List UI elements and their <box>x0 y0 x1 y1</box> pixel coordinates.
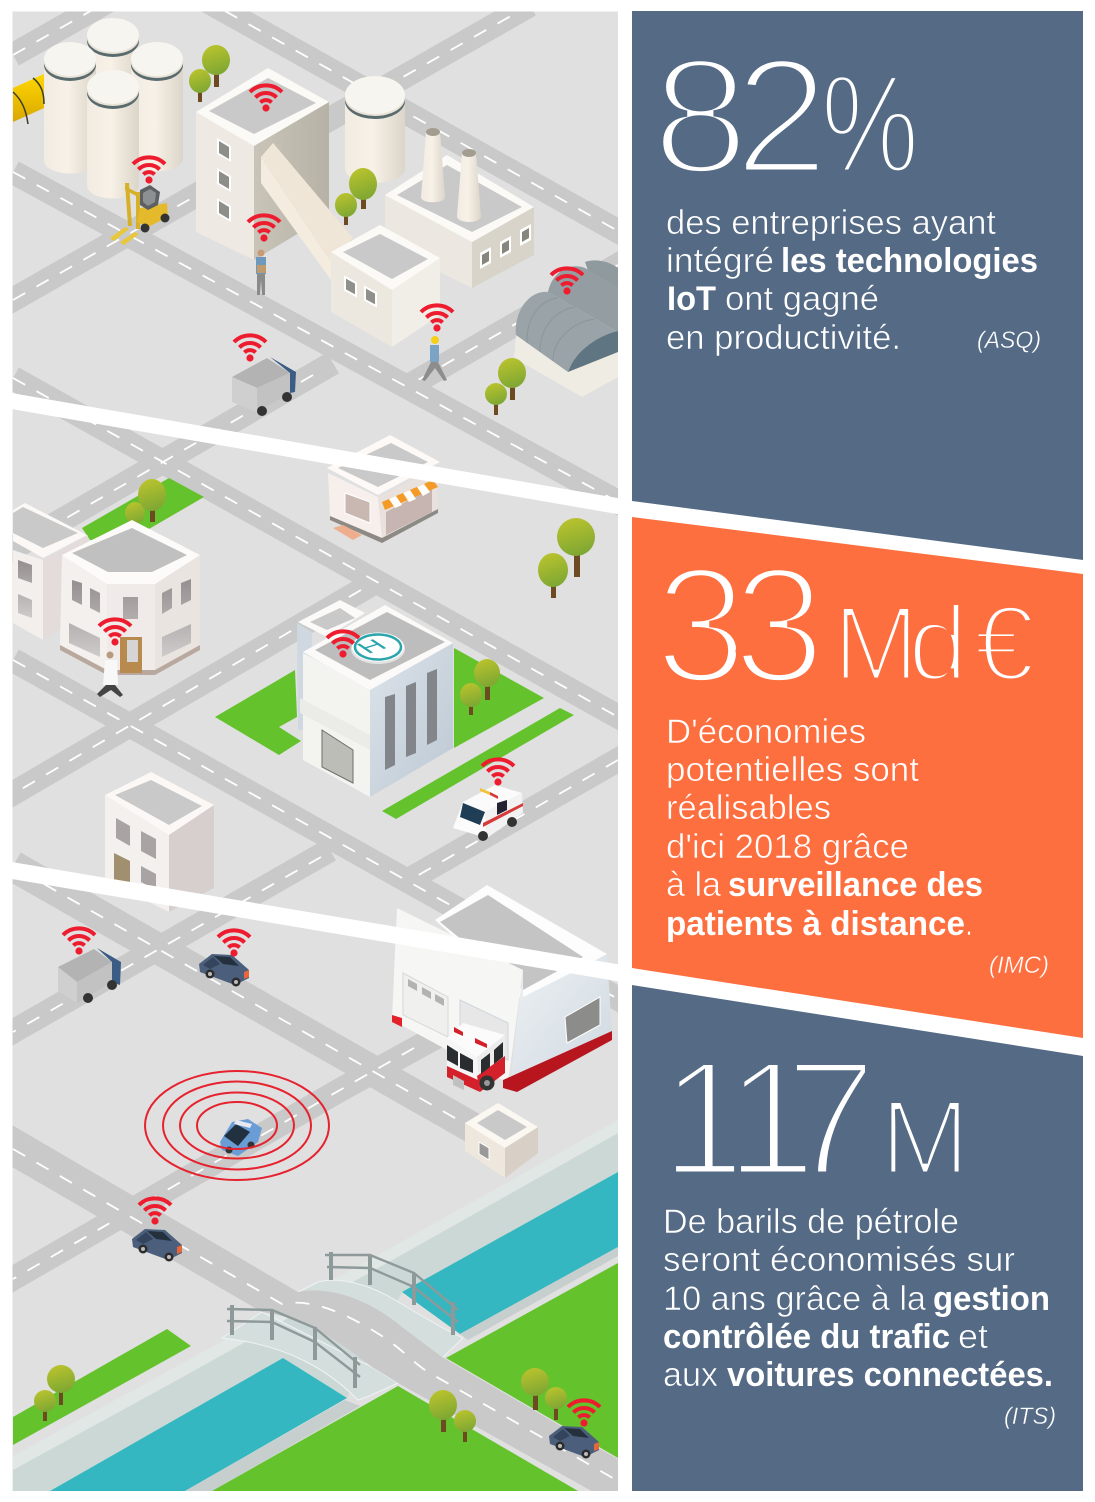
left arch <box>222 1312 398 1400</box>
worker with parcel <box>256 250 266 295</box>
big number 33 Md€: M <box>833 583 919 703</box>
body text <box>666 204 1038 357</box>
source ITS: (ITS) <box>1004 1403 1056 1430</box>
right arch <box>298 1280 463 1358</box>
conveyor <box>261 143 353 280</box>
body text: IoT <box>667 280 716 318</box>
body text: . <box>965 905 973 943</box>
worker with helmet <box>422 336 447 381</box>
factory small block <box>331 225 440 347</box>
bridge road deck <box>0 1118 640 1502</box>
body text: aux <box>663 1356 718 1394</box>
fire station <box>392 885 612 1092</box>
canal with water and banks <box>13 1120 618 1491</box>
helipad <box>351 632 405 664</box>
body text: d'ici 2018 grâce <box>666 828 909 866</box>
blue car on road <box>132 1229 182 1262</box>
body text <box>666 713 983 943</box>
big number 82%: 2 <box>734 24 829 208</box>
helipad: H <box>351 636 393 657</box>
body text: gestion <box>933 1280 1050 1318</box>
body text: réalisables <box>666 789 831 827</box>
body text <box>663 1203 1053 1394</box>
body text: en productivité. <box>666 319 901 357</box>
delivery truck <box>232 357 296 416</box>
city map illustration <box>0 0 640 1502</box>
blue car bottom right <box>549 1426 599 1458</box>
body text: De barils de pétrole <box>663 1203 959 1241</box>
body text: potentielles sont <box>666 751 920 789</box>
police car with signal rings <box>145 1071 329 1180</box>
body text: intégré <box>666 242 774 280</box>
body text: ont gagné <box>725 280 879 318</box>
shop <box>327 435 440 543</box>
big number 117 M <box>660 1026 970 1210</box>
body text: et <box>958 1318 989 1356</box>
big number 117 M: 117 <box>660 1026 877 1210</box>
source ASQ: (ASQ) <box>977 327 1041 354</box>
big number 33 Md€ <box>655 533 1035 717</box>
panel: 33 Md€ <box>632 517 1083 1038</box>
body text: patients à distance <box>666 905 965 943</box>
factory rear block with chimneys <box>385 128 534 288</box>
doctor <box>97 652 123 697</box>
big number 33 Md€: d <box>908 583 968 703</box>
factory tower <box>196 68 329 260</box>
fire truck <box>447 1023 505 1092</box>
rear building <box>105 772 214 912</box>
hospital <box>297 600 453 797</box>
townhouse left <box>13 503 88 640</box>
factory tanks <box>44 18 405 198</box>
body text: à la <box>666 866 721 904</box>
wifi signal icons <box>63 85 600 1427</box>
body text: voitures connectées. <box>727 1356 1053 1394</box>
body text: seront économisés sur <box>663 1241 1015 1279</box>
white diagonal separators over the map <box>0 391 640 985</box>
body text: D'économies <box>666 713 866 751</box>
warehouse <box>514 260 618 397</box>
big number 33 Md€: 3 <box>733 533 825 717</box>
body text: contrôlée du trafic <box>663 1318 950 1356</box>
forklift <box>110 183 170 245</box>
bridge <box>0 1118 640 1502</box>
big number 33 Md€: 3 <box>655 533 747 717</box>
guard house <box>465 1103 538 1178</box>
source IMC: (IMC) <box>989 952 1049 979</box>
green lawn areas <box>13 478 618 1491</box>
big number 82%: % <box>821 45 919 202</box>
trees <box>34 45 595 1442</box>
big number 82%: 8 <box>652 24 749 208</box>
yellow pipe <box>13 74 44 124</box>
panel: 117 M <box>632 985 1083 1491</box>
big number 117 M: M <box>880 1077 970 1197</box>
body text: surveillance des <box>728 866 983 904</box>
big number 82% <box>652 24 919 208</box>
road network <box>0 0 640 1286</box>
panel: 82% productivity <box>632 11 1083 560</box>
big number 33 Md€: € <box>974 583 1035 703</box>
blue car near truck <box>199 954 249 986</box>
bridge railings <box>227 1252 458 1388</box>
body text: 10 ans grâce à la <box>663 1280 926 1318</box>
ambulance <box>453 785 523 841</box>
corner townhouse <box>60 520 200 675</box>
body text: les technologies <box>781 242 1038 280</box>
second delivery truck <box>58 948 121 1003</box>
body text: des entreprises ayant <box>666 204 997 242</box>
